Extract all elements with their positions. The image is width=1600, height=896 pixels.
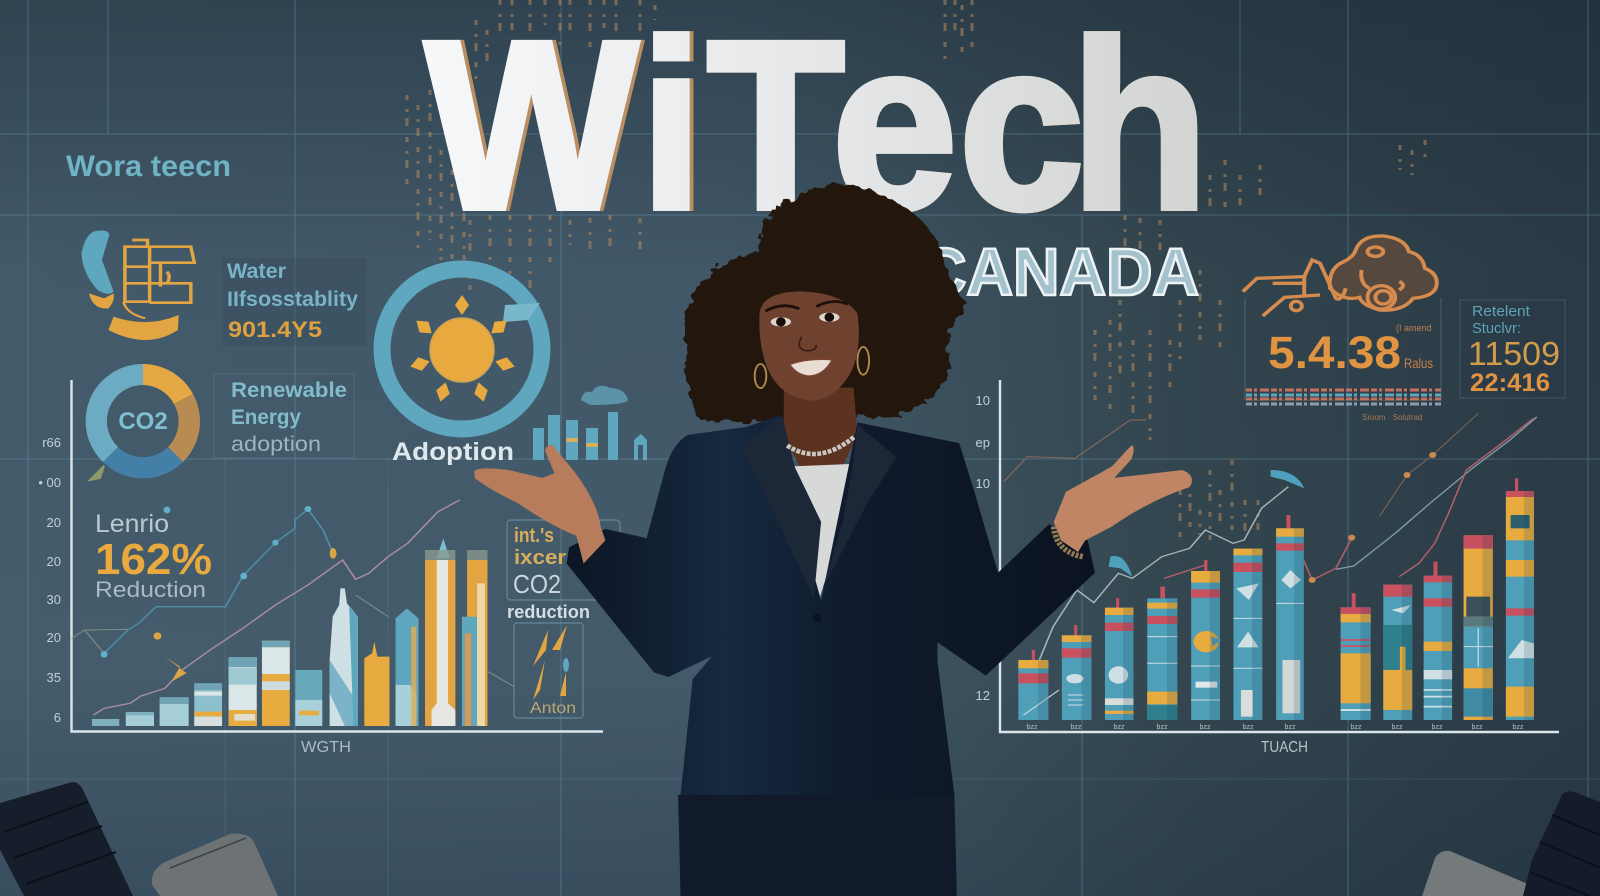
label: CO2: CO2	[513, 569, 561, 599]
bar tick labels: bzz	[1027, 724, 1038, 731]
y axis labels: 30	[47, 592, 61, 607]
chair: left dark	[0, 782, 133, 896]
necklace	[787, 436, 855, 454]
bar tick labels: bzz	[1472, 724, 1483, 731]
y axis labels: ep	[976, 435, 990, 450]
panel: CO2 reduction callout	[507, 520, 620, 622]
label: CO2: CO2	[118, 408, 168, 435]
bar tick labels: bzz	[1071, 724, 1082, 731]
left hand	[475, 445, 605, 564]
y axis labels: 10	[976, 393, 990, 408]
label: Reduction: Reduction	[95, 577, 206, 602]
value: 11509: 11509	[1468, 335, 1560, 372]
y axis labels: 20	[47, 554, 61, 569]
value: 901.4Y5: 901.4Y5	[228, 317, 322, 342]
bar 5	[1191, 560, 1221, 720]
y axis labels: 6	[54, 710, 61, 725]
bar 2	[1062, 625, 1092, 720]
trend lines behind bars	[1004, 413, 1537, 660]
chart axes	[72, 380, 603, 732]
face	[759, 291, 859, 401]
bar tick labels	[1027, 724, 1524, 731]
bar 8	[1341, 593, 1371, 720]
y axis labels: 20	[47, 515, 61, 530]
label: Iifsosstablity: IIfsosstablity	[227, 288, 358, 311]
panel: recent statistics	[1460, 300, 1565, 398]
value: 22:416: 22:416	[1470, 369, 1550, 397]
earrings	[755, 347, 869, 388]
y axis labels	[976, 393, 990, 703]
y axis labels	[38, 435, 61, 725]
bar 11	[1464, 535, 1493, 720]
icon: machine and cloud	[1243, 236, 1437, 316]
hair	[685, 185, 967, 422]
label: Anton: Anton	[530, 700, 576, 717]
y axis labels: 20	[47, 630, 61, 645]
axis title: TUACH: TUACH	[1261, 739, 1308, 756]
panel: renewable energy adoption	[214, 374, 354, 458]
mini bar chart with cloud	[533, 386, 647, 460]
eyes and brows	[765, 302, 848, 326]
bar tick labels: bzz	[1243, 724, 1254, 731]
bar 12	[1506, 478, 1534, 720]
bar 4	[1147, 587, 1177, 720]
axis title: WGTH: WGTH	[301, 739, 351, 756]
bar tick labels: bzz	[1285, 724, 1296, 731]
right hand	[1054, 445, 1192, 552]
bar tick labels: bzz	[1157, 724, 1168, 731]
chair: left grey	[152, 834, 278, 896]
smile	[790, 359, 832, 376]
small footnote: Sroom · Solutrad	[1362, 413, 1422, 422]
bars	[1018, 478, 1534, 720]
label: Water: Water	[227, 260, 286, 283]
bar 7	[1276, 515, 1304, 720]
suit jacket	[567, 415, 1095, 795]
bar 9	[1383, 585, 1412, 720]
left chart: growth bars and trend lines	[38, 380, 603, 756]
panel: main value 5.4.38	[1245, 298, 1441, 422]
bar 1	[1018, 650, 1059, 720]
person: presenter in navy suit	[475, 185, 1192, 896]
panel: water infeasibility stat	[222, 258, 367, 346]
bar 6	[1233, 549, 1262, 720]
nose	[799, 337, 816, 351]
small note: (I amend	[1396, 323, 1432, 333]
panel: Anton mini chart	[514, 623, 583, 718]
bar tick labels: bzz	[1432, 724, 1443, 731]
value: 5.4.38: 5.4.38	[1268, 327, 1401, 378]
y axis labels: 10	[976, 476, 990, 491]
label: Ralus: Ralus	[1404, 355, 1433, 371]
chart axes	[1000, 380, 1559, 732]
bar 10	[1424, 562, 1452, 720]
lapels	[741, 415, 896, 598]
y axis labels: 35	[47, 670, 61, 685]
bars and lines	[72, 500, 514, 726]
label: adoption: adoption	[231, 433, 321, 456]
icon: sun in circular arrow	[382, 269, 542, 429]
y axis labels: r66	[42, 435, 61, 450]
skirt	[678, 795, 957, 896]
bar 3	[1105, 598, 1133, 720]
label: int.'s: int.'s	[514, 525, 554, 547]
heading: Wora teecn: Wora teecn	[66, 150, 231, 183]
bracelet	[1054, 527, 1083, 557]
label: ixcer: ixcer	[514, 547, 566, 569]
small data rows	[1246, 390, 1441, 404]
chair: right dark	[1523, 791, 1600, 896]
jacket button	[813, 614, 822, 622]
bar tick labels: bzz	[1513, 724, 1524, 731]
chair: right grey	[1422, 851, 1538, 896]
bar tick labels: bzz	[1392, 724, 1403, 731]
subtitle: CANADA: CANADA	[920, 235, 1199, 310]
y axis labels: 12	[976, 688, 990, 703]
label: Stuclvr: Stuclvr:	[1472, 320, 1521, 337]
label: Lenrio: Lenrio	[95, 510, 169, 538]
y axis labels: • 00	[38, 475, 61, 490]
bar tick labels: bzz	[1200, 724, 1211, 731]
label: Energy: Energy	[231, 406, 301, 429]
label: Renewable: Renewable	[231, 379, 347, 402]
white top	[792, 464, 850, 601]
bar tick labels: bzz	[1114, 724, 1125, 731]
icon: water and building	[82, 231, 194, 340]
icon: CO2 donut chart	[86, 364, 200, 480]
bar tick labels: bzz	[1351, 724, 1362, 731]
label: reduction: reduction	[507, 602, 590, 622]
label: Retelent: Retelent	[1472, 303, 1531, 320]
value: 162%: 162%	[95, 535, 212, 584]
neck	[784, 388, 857, 466]
right chart: bars and trend lines	[976, 380, 1559, 756]
label: Adoption: Adoption	[392, 438, 514, 466]
